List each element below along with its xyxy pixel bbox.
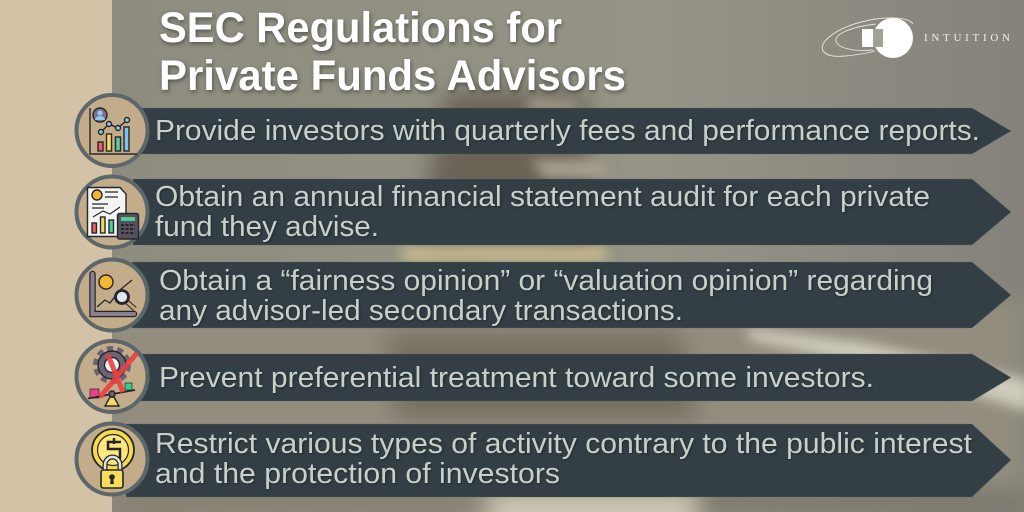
banner 4	[140, 354, 1011, 401]
banner 5: and the protection of investors	[155, 458, 560, 490]
banner 5: Restrict various types of activity contrary to the public interest	[155, 428, 972, 460]
banner 4: Prevent preferential treatment toward some investors.	[159, 362, 874, 394]
icon: financial report and calculator	[76, 176, 148, 248]
icon: coin with padlock	[76, 424, 148, 494]
title	[159, 4, 626, 100]
icon: chart with person	[76, 95, 148, 166]
banner 3: Obtain a “fairness opinion” or “valuation opinion” regarding	[159, 265, 933, 297]
title: SEC Regulations for	[159, 4, 562, 52]
banner 2	[133, 179, 1011, 245]
banner 1: Provide investors with quarterly fees and performance reports.	[155, 115, 980, 147]
banner 1	[140, 108, 1011, 154]
logo: Intuition	[822, 18, 1010, 58]
banner 2: fund they advise.	[155, 211, 379, 243]
icon: gear and scale crossed out	[76, 341, 148, 412]
title: Private Funds Advisors	[159, 52, 626, 100]
icon: chart with magnifier	[76, 260, 148, 330]
banner 3: any advisor-led secondary transactions.	[159, 295, 683, 327]
left beige strip	[0, 0, 112, 512]
banner 3	[132, 262, 1011, 328]
banner 5	[126, 424, 1011, 497]
banner 2: Obtain an annual financial statement audit for each private	[155, 181, 930, 213]
logo: Intuition: INTUITION	[924, 32, 1010, 44]
